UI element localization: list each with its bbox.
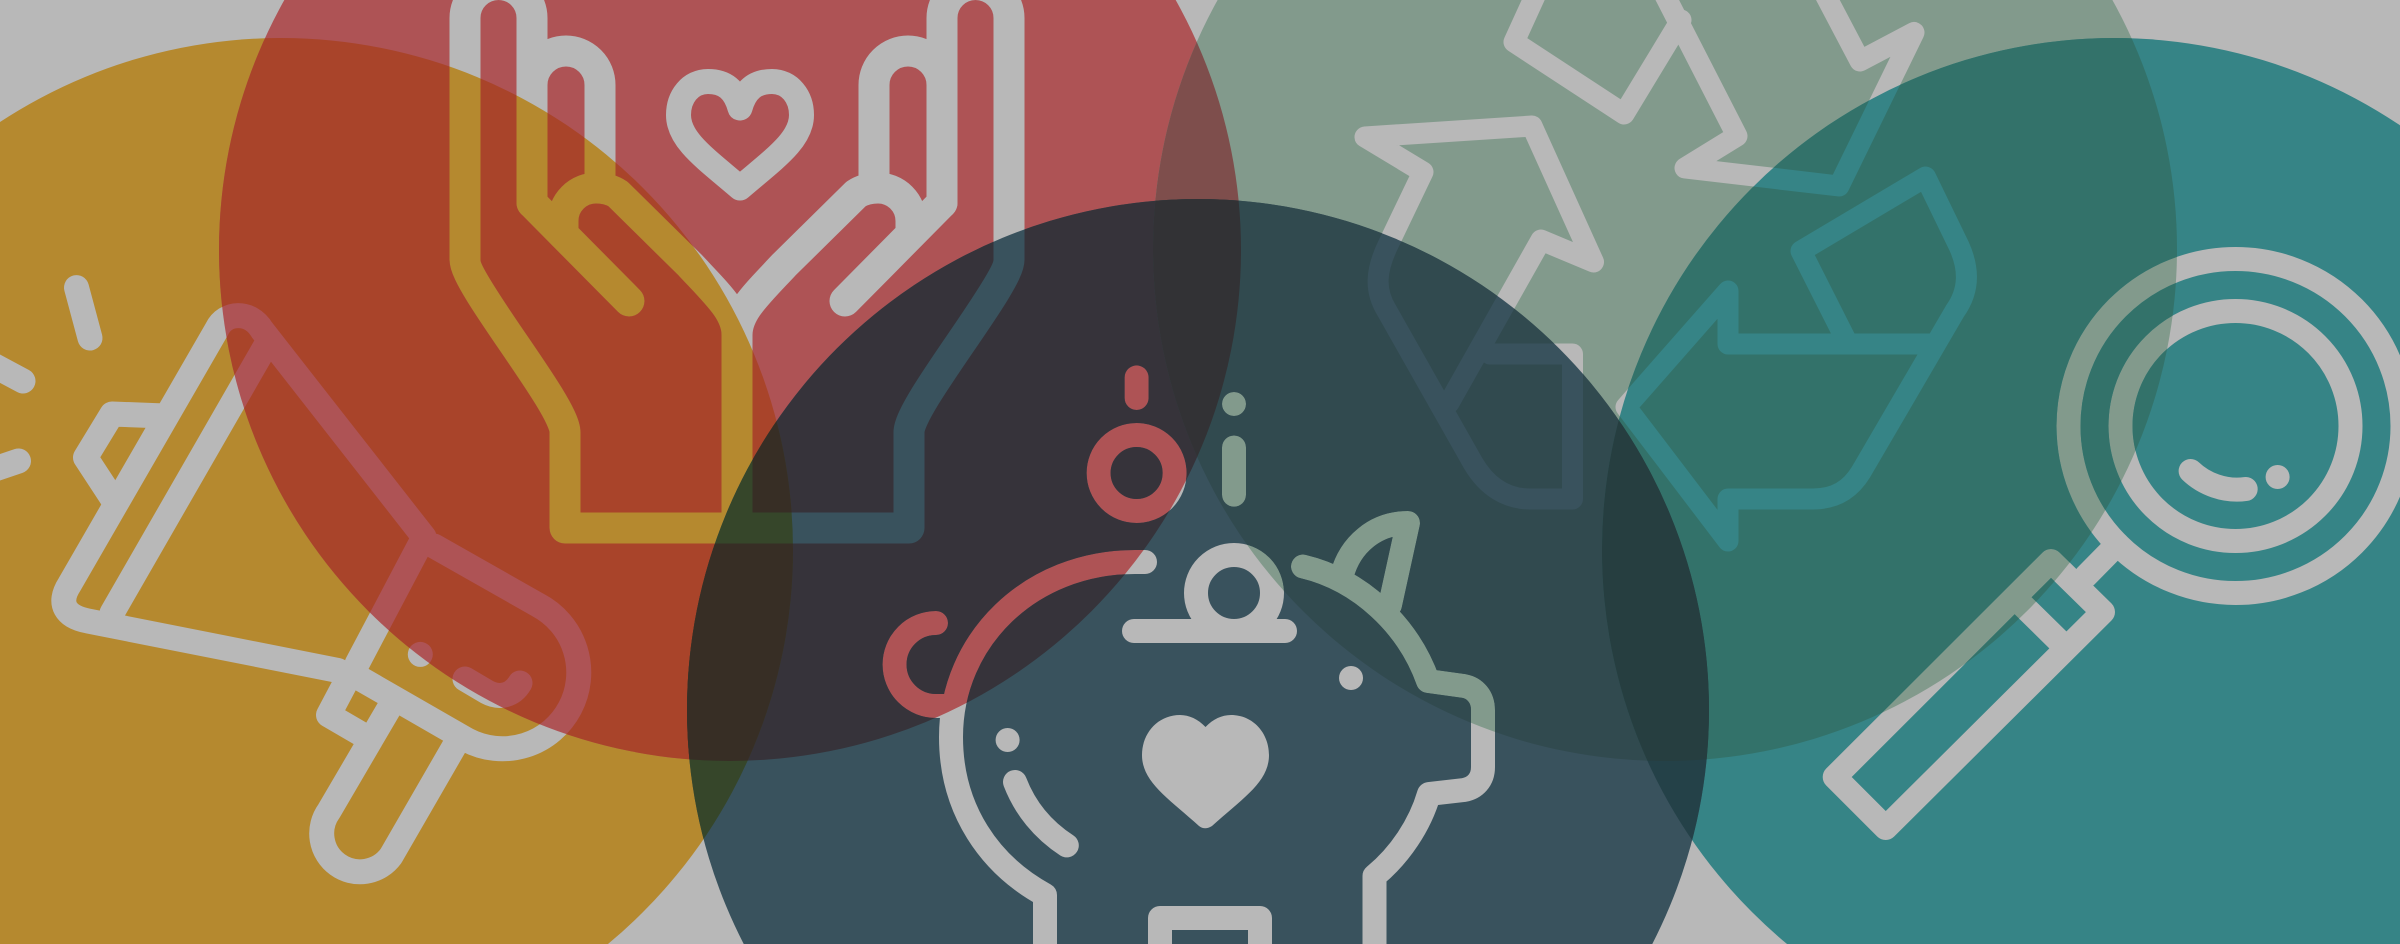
overlap: red and navy (687, 199, 1236, 760)
overlap: sage and navy (1156, 199, 1647, 760)
overlap: red and sage (1155, 42, 1239, 201)
panel: navy circle with piggy bank cut-out (689, 200, 1706, 944)
panel: teal circle with magnifying glass cut-out (1618, 38, 2400, 944)
overlap: teal and navy (1619, 420, 1709, 840)
overlap: sage and teal (1618, 38, 2177, 760)
panel: sage circle with recycling arrows cut-out (1155, 0, 2177, 732)
panel: red circle with hands and heart cut-out (219, 0, 1197, 760)
overlap: amber and navy (687, 421, 793, 839)
overlap: amber and red (219, 38, 776, 760)
panel: amber circle with megaphone cut-out (0, 38, 752, 944)
overlap: sage, teal and navy (1602, 420, 1709, 760)
overlap: red, sage and navy (1153, 199, 1241, 457)
overlap: amber, red and navy (687, 421, 793, 761)
